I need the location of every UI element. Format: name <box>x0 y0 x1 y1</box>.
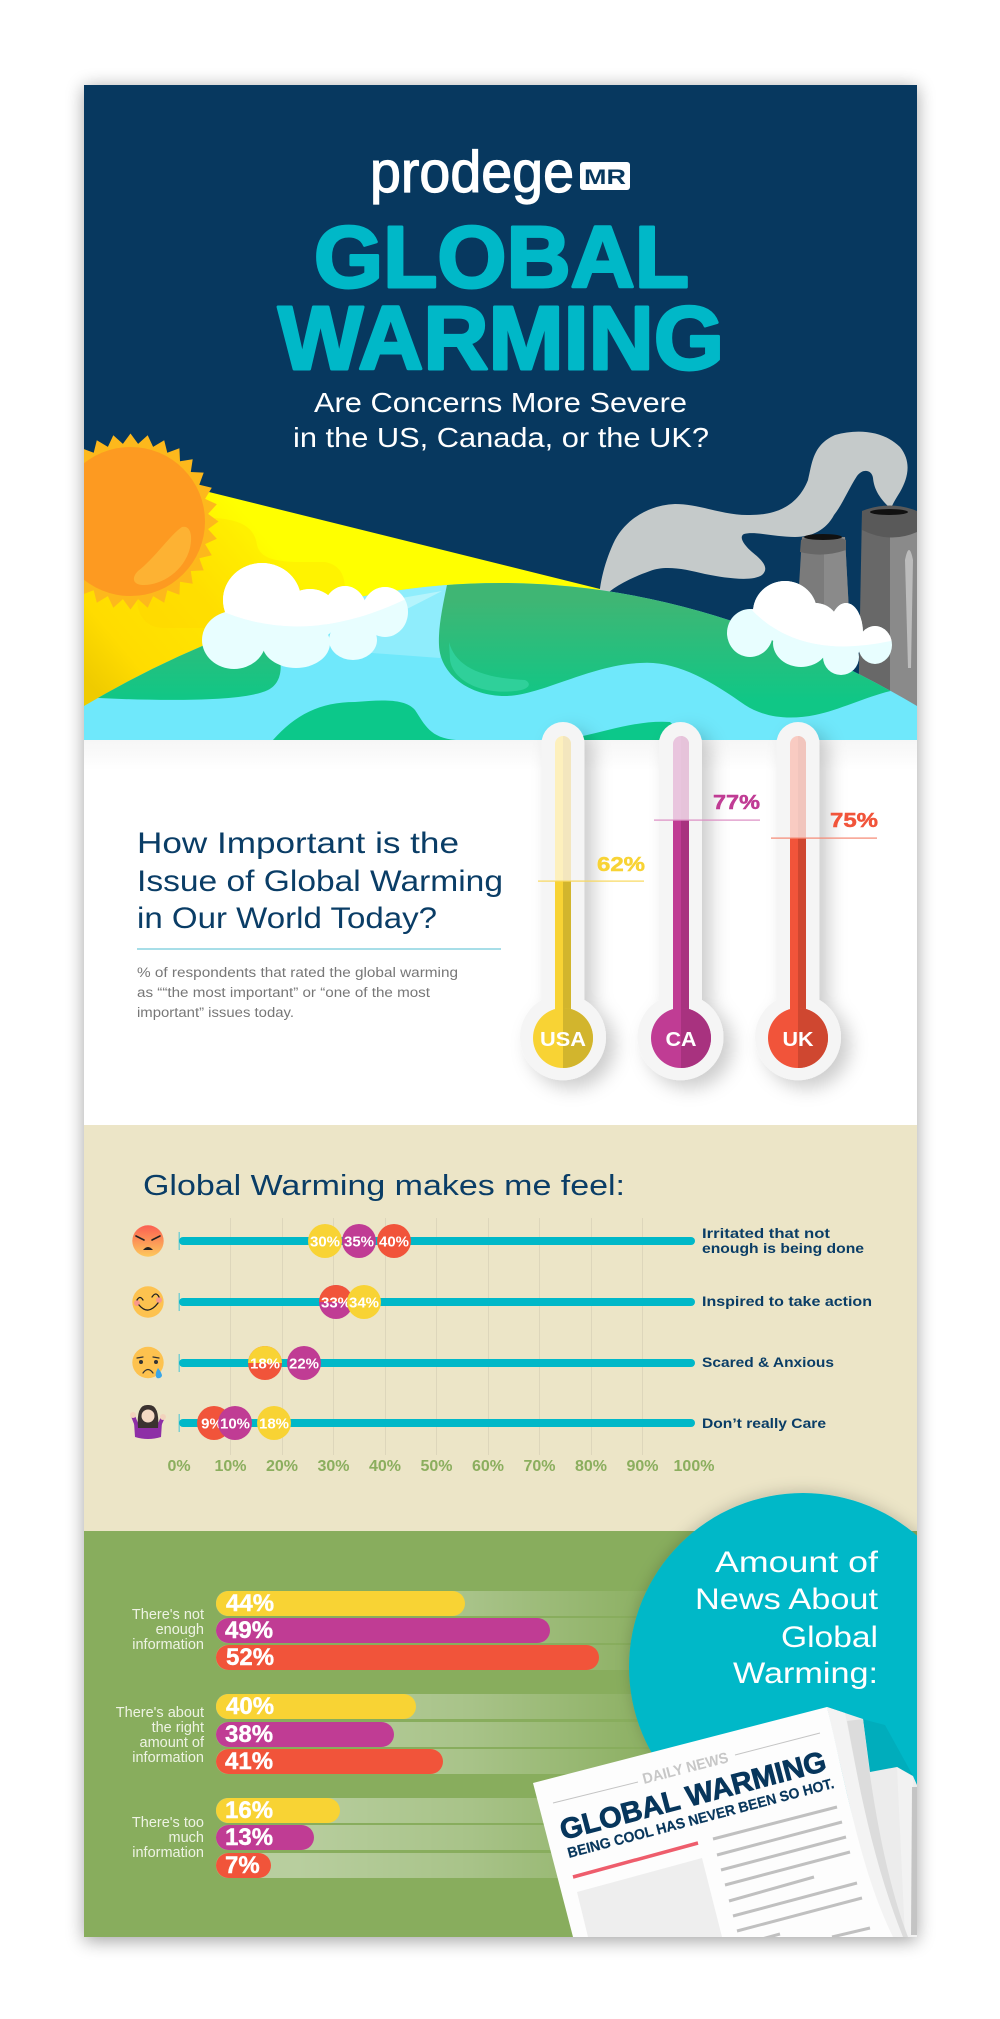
bar: irritated <box>178 1224 695 1258</box>
axis labels: 30% <box>317 1458 350 1475</box>
row labels: Scared & Anxious <box>702 1354 834 1370</box>
row labels: Don’t really Care <box>702 1415 826 1431</box>
emoji: shrug <box>130 1405 166 1439</box>
smoke <box>599 432 908 602</box>
thermometer: UK 75% <box>755 722 878 1080</box>
bar: don't care: 10% <box>220 1416 250 1432</box>
circle: amount of news heading: Amount of <box>715 1546 879 1579</box>
bar: don't care <box>178 1406 695 1440</box>
thermometer: USA 62%: USA <box>540 1029 586 1051</box>
group: not enough information: 49% <box>225 1617 273 1644</box>
bar: inspired <box>178 1285 695 1319</box>
thermometer: UK 75%: UK <box>782 1029 814 1051</box>
axis labels: 80% <box>575 1458 607 1475</box>
panel: importance <box>84 722 917 1125</box>
bar: don't care: 9% <box>201 1416 223 1432</box>
logo: prodege MR: MR <box>584 166 626 189</box>
row labels <box>702 1225 872 1431</box>
bar: irritated: 35% <box>344 1234 374 1250</box>
cloud: right <box>727 581 892 675</box>
newspaper: GLOBAL WARMING <box>557 1746 830 1847</box>
bar: irritated: 30% <box>310 1234 340 1250</box>
sun <box>84 434 218 610</box>
panel: feelings <box>84 1125 917 1531</box>
circle: amount of news heading: Global <box>781 1621 878 1654</box>
group: right amount of information: 38% <box>225 1721 273 1748</box>
newspaper <box>533 1707 917 1945</box>
row labels: Irritated that not <box>702 1225 830 1241</box>
cloud: left <box>202 563 408 669</box>
thermometer: CA 77%: 77% <box>713 792 760 814</box>
planet earth <box>84 583 917 740</box>
bar: don't care: 18% <box>259 1416 289 1432</box>
group: right amount of information: amount of <box>140 1735 205 1751</box>
land highlight <box>449 642 529 692</box>
panel: amount of news <box>84 1493 977 1945</box>
panel drop shadow <box>84 87 917 1941</box>
sun ray <box>84 492 600 706</box>
circle: amount of news heading <box>626 1485 917 1810</box>
thermometer: CA 77%: CA <box>666 1029 696 1051</box>
thermometer: USA 62% <box>520 722 645 1080</box>
subtitle: in the US, Canada, or the UK? <box>293 422 709 453</box>
heading: how important: Issue of Global Warming <box>137 865 503 898</box>
group: too much information: 7% <box>225 1852 260 1879</box>
bar: irritated: 40% <box>379 1234 409 1250</box>
group: too much information: much <box>169 1830 204 1846</box>
group: not enough information: There's not <box>132 1607 204 1623</box>
emoji: smile <box>132 1286 164 1318</box>
group: right amount of information: the right <box>152 1720 204 1736</box>
land: center <box>438 583 891 718</box>
heading: how important: in Our World Today? <box>137 902 437 935</box>
group: right amount of information: There's about <box>116 1705 204 1721</box>
circle: amount of news heading: Warming: <box>733 1657 878 1690</box>
axis labels <box>167 1458 714 1475</box>
chimney: large <box>858 506 917 720</box>
group: not enough information: enough <box>156 1622 204 1638</box>
group: not enough information: 44% <box>226 1590 274 1617</box>
row labels: enough is being done <box>702 1240 864 1256</box>
respondents note: as ““the most important” or “one of the most <box>137 985 430 1000</box>
circle: amount of news heading: News About <box>695 1583 879 1616</box>
bar: scared: 18% <box>250 1356 280 1372</box>
group: right amount of information: 41% <box>225 1748 273 1775</box>
title: global warming <box>276 224 720 372</box>
thermometer: CA 77% <box>638 722 760 1080</box>
bar: inspired: 34% <box>349 1294 379 1312</box>
panel: header <box>42 85 930 740</box>
newspaper: DAILY NEWS <box>641 1749 730 1788</box>
land: bottom right <box>583 722 672 740</box>
axis labels: 0% <box>167 1458 191 1475</box>
group: too much information: information <box>132 1845 204 1861</box>
group: not enough information <box>132 1590 696 1671</box>
group: right amount of information <box>116 1693 696 1775</box>
axis labels: 70% <box>523 1458 556 1475</box>
axis labels: 100% <box>674 1458 714 1475</box>
light water <box>330 584 452 658</box>
subtitle: Are Concerns More Severe <box>314 387 687 418</box>
title: global warming: GLOBAL <box>314 209 689 306</box>
land: left <box>98 646 281 700</box>
group: too much information: 13% <box>225 1824 273 1851</box>
axis labels: 50% <box>420 1458 453 1475</box>
row labels: Inspired to take action <box>702 1293 872 1309</box>
logo: prodege MR: prodege <box>370 140 574 205</box>
thermometer: UK 75%: 75% <box>830 810 878 832</box>
thermometer: USA 62%: 62% <box>597 854 645 876</box>
newspaper: BEING COOL HAS NEVER BEEN SO HOT. <box>566 1776 836 1862</box>
title: global warming: WARMING <box>278 289 724 389</box>
emoji: crying <box>132 1347 164 1378</box>
land: bottom <box>273 700 456 740</box>
group: not enough information: 52% <box>226 1644 274 1671</box>
heading: how important <box>137 827 503 935</box>
axis labels: 60% <box>472 1458 504 1475</box>
bar: scared: 22% <box>289 1356 319 1372</box>
respondents note: important” issues today. <box>137 1005 294 1020</box>
heading: makes me feel: Global Warming makes me feel: <box>143 1170 625 1202</box>
group: right amount of information: information <box>132 1750 204 1766</box>
subtitle <box>295 392 708 450</box>
heading: how important: How Important is the <box>137 827 459 860</box>
respondents note: % of respondents that rated the global warming <box>137 965 458 980</box>
bar: scared <box>178 1346 695 1380</box>
axis labels: 40% <box>369 1458 401 1475</box>
bar: inspired: 33% <box>321 1294 351 1312</box>
group: too much information <box>132 1797 696 1879</box>
group: not enough information: information <box>132 1637 204 1653</box>
emoji: angry <box>132 1225 164 1257</box>
axis labels: 10% <box>214 1458 247 1475</box>
respondents note <box>137 965 458 1020</box>
axis labels: 20% <box>266 1458 298 1475</box>
group: too much information: There's too <box>132 1815 204 1831</box>
group: right amount of information: 40% <box>226 1693 274 1720</box>
group: too much information: 16% <box>225 1797 273 1824</box>
chimney: small <box>799 534 848 612</box>
ray glow blob <box>206 518 344 595</box>
axis labels: 90% <box>626 1458 659 1475</box>
